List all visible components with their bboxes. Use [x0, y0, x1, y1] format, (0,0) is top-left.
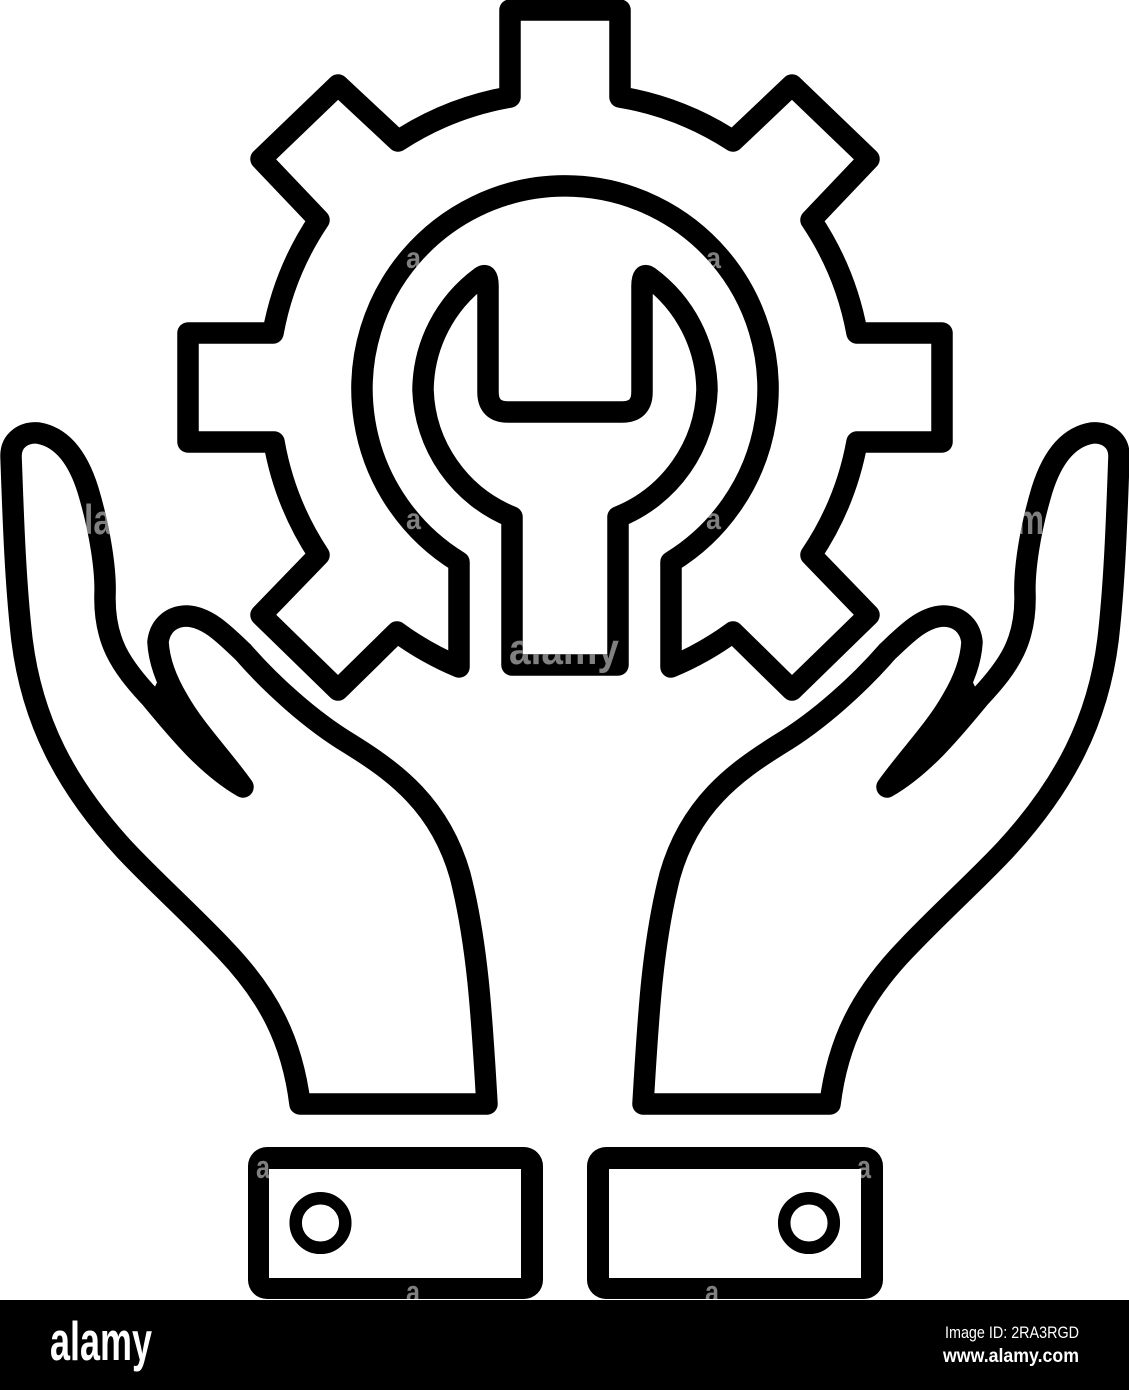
footer bar — [0, 1300, 1129, 1390]
watermark fragments: alamy — [509, 625, 619, 674]
thumb wedge — [150, 670, 243, 787]
icon: right cuff — [587, 1147, 883, 1299]
website: www.alamy.com — [942, 1346, 1079, 1367]
watermark fragments: a — [705, 1274, 719, 1310]
watermark fragments — [84, 242, 1044, 1310]
watermark fragments: a — [406, 1274, 420, 1310]
icon: left cuff — [248, 1147, 543, 1299]
watermark fragments: a — [857, 1149, 871, 1185]
watermark fragments: a — [706, 242, 721, 275]
icon: right hand — [643, 433, 1119, 1104]
image id: Image ID: 2RA3RGD — [945, 1324, 1079, 1342]
thumb wedge, right — [887, 670, 980, 787]
watermark fragments: a — [706, 503, 721, 536]
watermark fragments: la — [84, 496, 113, 543]
watermark fragments: a — [256, 1149, 270, 1185]
watermark fragments: m — [1016, 496, 1044, 543]
watermark fragments: a — [406, 242, 421, 275]
watermark fragments: a — [406, 503, 421, 536]
icon: left hand — [11, 433, 487, 1104]
icon: gear outline — [188, 10, 942, 690]
icon: wrench outline — [423, 276, 707, 665]
footer logo: alamy — [50, 1310, 152, 1372]
